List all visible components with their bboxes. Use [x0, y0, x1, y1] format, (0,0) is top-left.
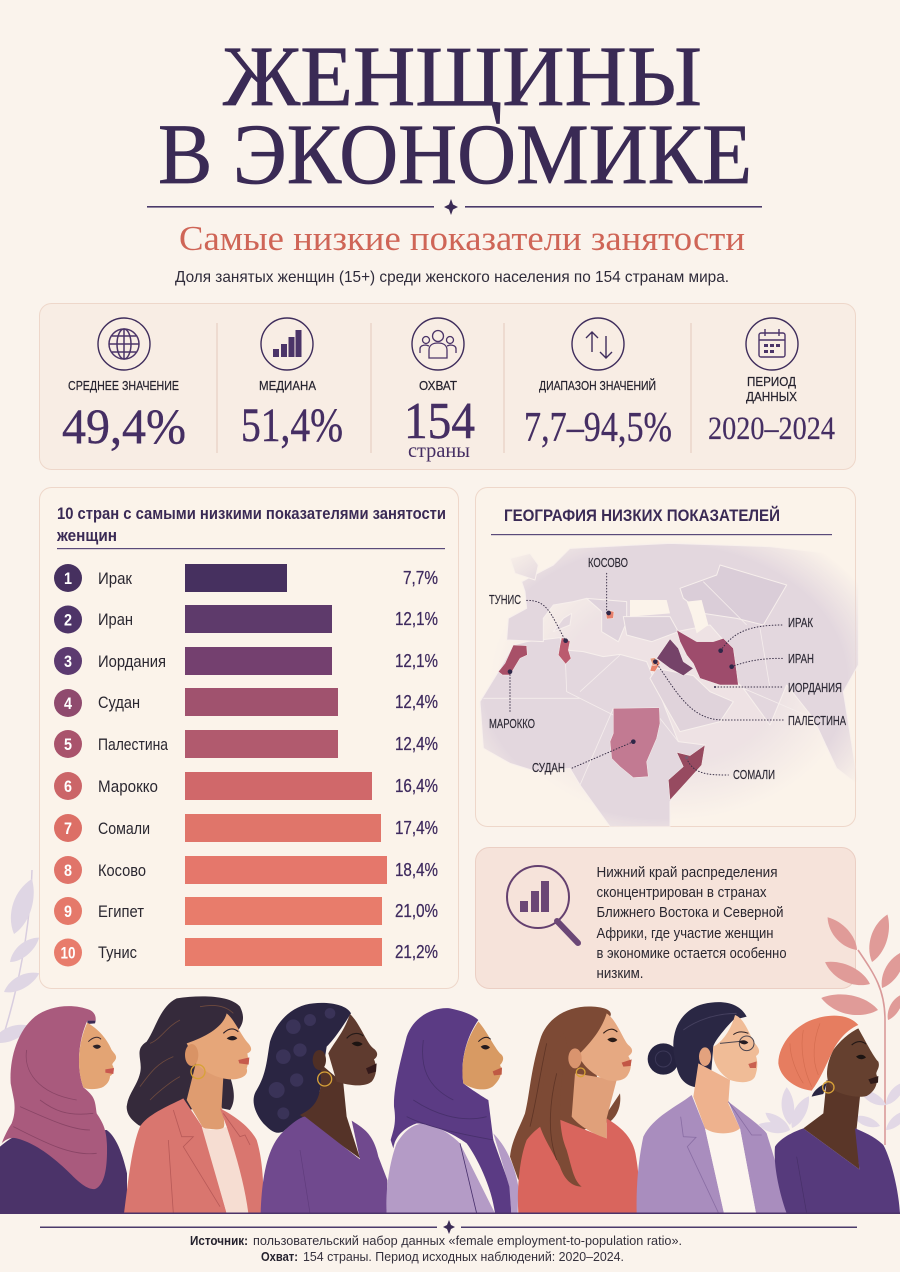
- row: Египет: 21,0%: [395, 901, 438, 921]
- description: Доля занятых женщин (15+) среди женского населения по 154 странам мира.: [175, 269, 729, 286]
- insight text: Ближнего Востока и Северной: [596, 904, 784, 921]
- map labels: ИРАН: [788, 651, 814, 666]
- panel: top 10 bar chart: [40, 488, 458, 988]
- stat: average: 49,4%: [62, 398, 186, 454]
- title divider: [147, 199, 762, 215]
- row: Марокко: Марокко: [98, 777, 158, 796]
- map labels: СОМАЛИ: [733, 767, 775, 782]
- title: ЖЕНЩИНЫ: [223, 28, 702, 124]
- row: Судан: [54, 688, 438, 717]
- row: Иран: 2: [64, 610, 72, 630]
- row: Марокко: 6: [64, 777, 72, 796]
- decorative leaves: right: [758, 912, 900, 1145]
- map wash: [490, 540, 854, 820]
- stat: median: МЕДИАНА: [259, 379, 317, 393]
- stat: range: 7,7–94,5%: [524, 405, 672, 451]
- woman 7: coral turban, purple top: [775, 1016, 900, 1213]
- row: Марокко: [54, 772, 438, 800]
- insight text: сконцентрирован в странах: [596, 884, 767, 901]
- row: Косово: 18,4%: [395, 860, 438, 880]
- illustration: row of women in profile: [0, 996, 900, 1213]
- row: Тунис: 21,2%: [395, 942, 438, 962]
- footer divider: [40, 1220, 857, 1234]
- map labels: [489, 555, 846, 782]
- woman 3: curly hair, purple top: [254, 1003, 387, 1213]
- row: Косово: 8: [64, 861, 72, 880]
- stat: coverage: страны: [408, 438, 470, 462]
- row: Сомали: Сомали: [98, 819, 150, 838]
- band baseline: [0, 1212, 900, 1214]
- insight text: Африки, где участие женщин: [596, 925, 774, 942]
- woman 5: long brown hair, coral top: [510, 1007, 639, 1213]
- row: Сомали: 17,4%: [395, 818, 438, 838]
- chart heading: 10 стран с самыми низкими показателями занятости: [57, 504, 446, 523]
- row: Иордания: [54, 647, 438, 675]
- row: Иран: [54, 605, 438, 634]
- row: Тунис: Тунис: [98, 943, 137, 962]
- insight text: в экономике остается особенно: [596, 945, 786, 962]
- stat: period: ДАННЫХ: [746, 390, 798, 404]
- row: Ирак: Ирак: [98, 569, 132, 588]
- stat: coverage: ОХВАТ: [419, 379, 457, 393]
- insight text: [596, 864, 786, 982]
- map labels: ИОРДАНИЯ: [788, 680, 842, 695]
- chart heading: [56, 504, 446, 549]
- map labels: ИРАК: [788, 615, 813, 630]
- panel: key statistics: [40, 304, 856, 470]
- stat: median: [241, 318, 343, 452]
- row: Египет: [54, 897, 438, 925]
- title: В ЭКОНОМИКЕ: [158, 106, 752, 202]
- stat: range: ДИАПАЗОН ЗНАЧЕНИЙ: [539, 378, 656, 393]
- row: Тунис: 10: [60, 944, 76, 962]
- stat: coverage: 154: [404, 393, 475, 450]
- woman 2: wavy dark hair, salmon blazer: [124, 996, 264, 1213]
- stat: period: [708, 318, 835, 447]
- map labels: ПАЛЕСТИНА: [788, 713, 846, 728]
- row: Сомали: 7: [64, 819, 72, 838]
- woman 1: pink hijab: [0, 1006, 127, 1213]
- row: Иран: 12,1%: [395, 609, 438, 629]
- stat: period: 2020–2024: [708, 411, 835, 447]
- stat: average: СРЕДНЕЕ ЗНАЧЕНИЕ: [68, 379, 179, 393]
- row: Палестина: [54, 730, 438, 758]
- decorative leaves: left: [0, 870, 43, 1048]
- map labels: КОСОВО: [588, 555, 628, 570]
- highlighted countries: [498, 610, 738, 800]
- stat: range: [524, 318, 672, 451]
- map markers: [508, 611, 734, 759]
- row: Судан: 4: [64, 694, 72, 713]
- row: Иордания: Иордания: [98, 652, 166, 671]
- footer source text: 154 страны. Период исходных наблюдений: 2020–2024.: [303, 1250, 624, 1264]
- row: Марокко: 16,4%: [395, 776, 438, 796]
- row: Иордания: 12,1%: [395, 651, 438, 671]
- row: Иран: Иран: [98, 610, 133, 629]
- row: Египет: 9: [64, 902, 72, 921]
- row: Косово: [54, 856, 438, 884]
- map labels: СУДАН: [532, 760, 565, 775]
- row: Палестина: 5: [64, 735, 72, 754]
- row: Судан: Судан: [98, 693, 140, 712]
- stat: median: 51,4%: [241, 399, 343, 452]
- chart heading: женщин: [56, 526, 117, 545]
- row: Палестина: 12,4%: [395, 734, 438, 754]
- map labels: ТУНИС: [489, 592, 521, 607]
- footer source text: Источник:: [190, 1234, 248, 1248]
- stat: average: [62, 318, 186, 454]
- row: Тунис: [54, 938, 438, 966]
- row: Иордания: 3: [64, 652, 72, 671]
- row: Косово: Косово: [98, 861, 146, 880]
- map leader lines: [510, 573, 783, 775]
- woman 4: violet hijab, lilac jacket: [386, 1008, 518, 1213]
- woman 6: bun, glasses, lilac blazer: [637, 1002, 787, 1213]
- row: Судан: 12,4%: [395, 692, 438, 712]
- map labels: МАРОККО: [489, 716, 535, 731]
- footer source text: Охват:: [261, 1250, 298, 1264]
- panel: geography map: [476, 488, 858, 827]
- stat: period: ПЕРИОД: [747, 375, 796, 389]
- stat: coverage: [404, 318, 475, 462]
- row: Сомали: [54, 814, 438, 842]
- footer source text: [190, 1234, 682, 1264]
- insight text: низким.: [596, 965, 644, 982]
- row: Ирак: [54, 564, 438, 592]
- map heading: ГЕОГРАФИЯ НИЗКИХ ПОКАЗАТЕЛЕЙ: [504, 506, 780, 525]
- row: Ирак: 7,7%: [403, 568, 438, 588]
- icon: magnifier with bars: [507, 866, 578, 943]
- subtitle: Самые низкие показатели занятости: [179, 219, 745, 258]
- row: Ирак: 1: [64, 569, 72, 588]
- footer source text: пользовательский набор данных «female employment-to-population ratio».: [253, 1234, 682, 1248]
- map land and highlighted countries: [480, 543, 858, 827]
- row: Палестина: Палестина: [98, 735, 168, 754]
- title: [158, 28, 752, 202]
- panel: insight callout: [476, 848, 856, 988]
- row: Египет: Египет: [98, 902, 144, 921]
- insight text: Нижний край распределения: [596, 864, 778, 881]
